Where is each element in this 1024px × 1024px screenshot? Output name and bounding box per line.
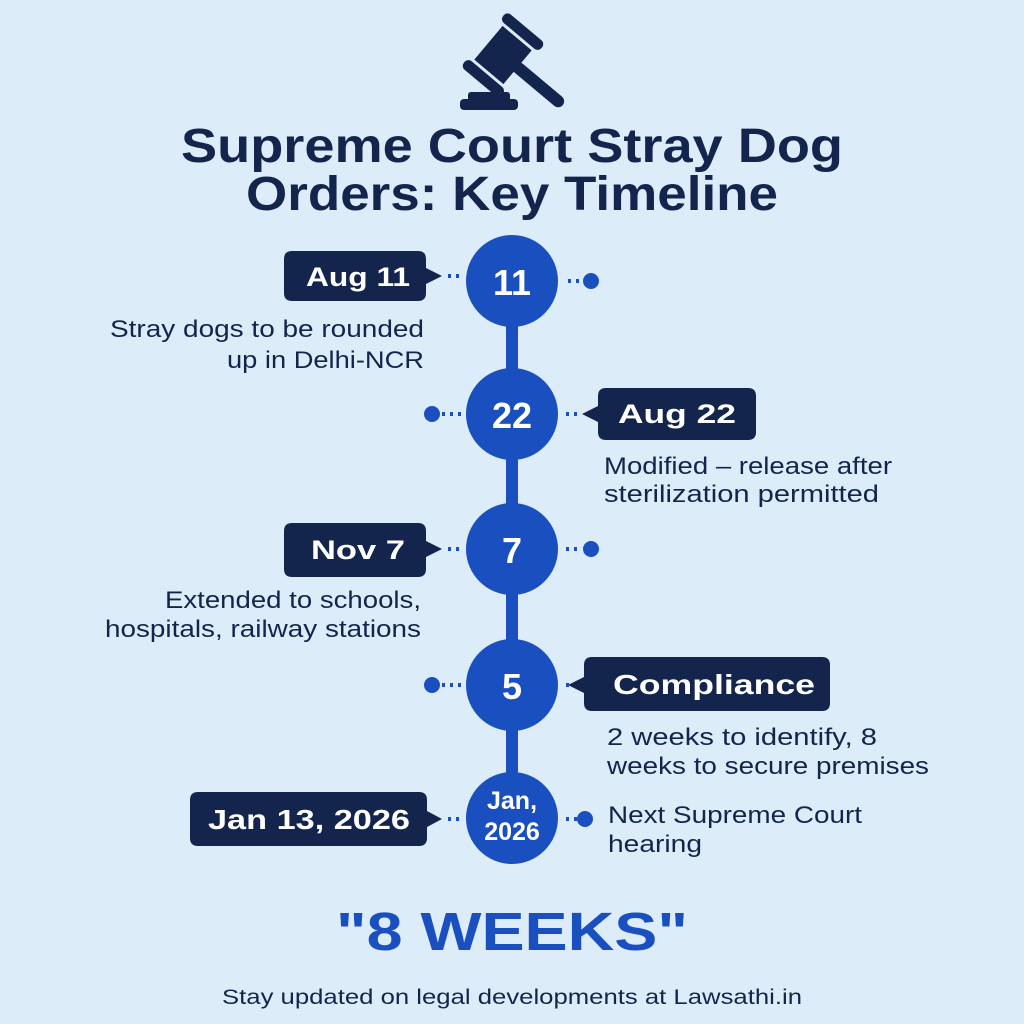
timeline line — [506, 281, 518, 818]
event: Compliance: 2 weeks to identify, 8 — [607, 724, 877, 751]
event: Aug 22: Aug 22 — [618, 399, 736, 429]
event: Jan 13, 2026: hearing — [608, 831, 702, 858]
event: Aug 22 — [424, 368, 892, 508]
event: Jan 13, 2026: 2026 — [484, 818, 540, 846]
event: Nov 7: 7 — [502, 530, 522, 571]
footer: Stay updated on legal developments at Lawsathi.in — [222, 986, 802, 1009]
event: Jan 13, 2026: Jan, — [487, 787, 537, 815]
event: Jan 13, 2026: Jan 13, 2026 — [208, 804, 410, 835]
event: Aug 22: Modified – release after — [604, 453, 892, 480]
highlight: 8 weeks: "8 WEEKS" — [336, 902, 688, 962]
event: Compliance — [424, 639, 929, 780]
title: Orders: Key Timeline — [246, 168, 778, 221]
event: Aug 22: sterilization permitted — [604, 481, 879, 508]
event: Aug 22: 22 — [492, 395, 532, 436]
event: Jan 13, 2026 — [190, 772, 862, 864]
event: Jan 13, 2026: Next Supreme Court — [608, 802, 862, 829]
title: Supreme Court Stray Dog — [181, 120, 843, 173]
event: Compliance: 5 — [502, 666, 522, 707]
event: Compliance: Compliance — [613, 669, 815, 700]
title — [181, 120, 843, 221]
event: Aug 11 — [110, 235, 599, 374]
icon: gavel — [460, 11, 586, 133]
event: Aug 11: Aug 11 — [306, 262, 410, 292]
event: Compliance: weeks to secure premises — [606, 753, 929, 780]
event: Aug 11: up in Delhi-NCR — [227, 347, 424, 374]
event: Nov 7: Extended to schools, — [165, 587, 421, 614]
event: Nov 7: hospitals, railway stations — [105, 616, 421, 643]
event: Aug 11: 11 — [493, 262, 531, 303]
event: Nov 7: Nov 7 — [311, 535, 405, 565]
event: Nov 7 — [105, 503, 599, 643]
event: Aug 11: Stray dogs to be rounded — [110, 316, 424, 343]
